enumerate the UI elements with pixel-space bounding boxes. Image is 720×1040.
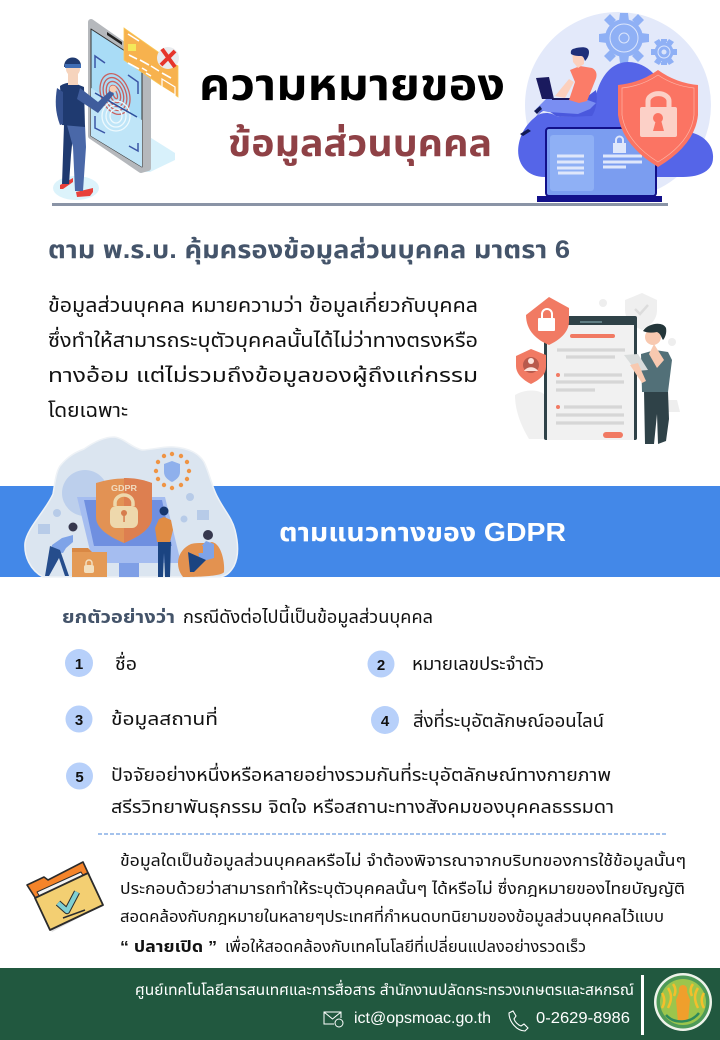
illustration: fingerprint phone <box>53 22 179 200</box>
footer organisation name: ศูนย์เทคโนโลยีสารสนเทศและการสื่อสาร สำนักงานปลัดกระทรวงเกษตรและสหกรณ์ <box>135 979 634 999</box>
footer <box>0 968 720 1040</box>
definition paragraph: ทางอ้อม แต่ไม่รวมถึงข้อมูลของผู้ถึงแก่กรรม <box>48 364 478 388</box>
item 5 <box>66 762 614 818</box>
icon: phone <box>509 1011 528 1031</box>
illustration: GDPR <box>25 437 238 577</box>
examples intro <box>62 604 433 629</box>
item 2 <box>368 650 544 678</box>
subtitle: ข้อมูลส่วนบุคคล <box>228 123 492 166</box>
banner heading: ตามแนวทางของ GDPR <box>279 517 566 547</box>
item 5: 5 <box>75 769 84 786</box>
item 1 <box>65 649 137 677</box>
item 3: ข้อมูลสถานที่ <box>111 706 218 731</box>
illustration: document and thinking man <box>515 293 680 444</box>
examples intro: ยกตัวอย่างว่า <box>62 607 175 627</box>
note paragraph: สอดคล้องกับกฎหมายในหลายๆประเทศที่กำหนดบทนิยามของข้อมูลส่วนบุคคลไว้แบบ <box>120 905 664 926</box>
divider <box>641 975 644 1035</box>
note paragraph: เพื่อให้สอดคล้องกับเทคโนโลยีที่เปลี่ยนแปลงอย่างรวดเร็ว <box>225 935 586 956</box>
item 4 <box>371 706 604 734</box>
note paragraph: “ ปลายเปิด ” <box>120 939 217 956</box>
note paragraph: ข้อมูลใดเป็นข้อมูลส่วนบุคคลหรือไม่ จำต้องพิจารณาจากบริบทของการใช้ข้อมูลนั้นๆ <box>120 850 686 870</box>
logo <box>654 973 712 1031</box>
definition paragraph: ข้อมูลส่วนบุคคล หมายความว่า ข้อมูลเกี่ยวกับบุคคล <box>48 291 478 318</box>
item 1: ชื่อ <box>115 651 137 674</box>
section heading: ตาม พ.ร.บ. คุ้มครองข้อมูลส่วนบุคคล มาตรา 6 <box>48 236 570 265</box>
illustration: GDPR: GDPR <box>111 484 137 493</box>
definition paragraph: โดยเฉพาะ <box>48 400 128 422</box>
definition paragraph: ซึ่งทำให้สามารถระบุตัวบุคคลนั้นได้ไม่ว่าทางตรงหรือ <box>48 326 478 352</box>
note paragraph: ประกอบด้วยว่าสามารถทำให้ระบุตัวบุคคลนั้นๆ ได้หรือไม่ ซึ่งกฎหมายของไทยบัญญัติ <box>120 877 685 898</box>
item 5: ปัจจัยอย่างหนึ่งหรือหลายอย่างรวมกันที่ระบุอัตลักษณ์ทางกายภาพ <box>111 762 611 786</box>
examples intro: กรณีดังต่อไปนี้เป็นข้อมูลส่วนบุคคล <box>183 604 433 629</box>
item 5: สรีรวิทยาพันธุกรรม จิตใจ หรือสถานะทางสังคมของบุคคลธรรมดา <box>111 797 614 818</box>
blue banner <box>0 486 720 577</box>
note paragraph <box>120 850 686 956</box>
illustration: cloud security <box>518 12 713 202</box>
email address: ict@opsmoac.go.th <box>354 1010 491 1027</box>
item 2: 2 <box>377 657 385 674</box>
item 4: 4 <box>381 713 390 730</box>
item 1: 1 <box>75 656 83 673</box>
title: ความหมายของ <box>199 61 505 110</box>
definition paragraph <box>48 291 478 422</box>
icon: folder with check <box>27 862 103 932</box>
item 3 <box>66 706 218 732</box>
phone number: 0-2629-8986 <box>536 1010 630 1027</box>
item 4: สิ่งที่ระบุอัตลักษณ์ออนไลน์ <box>413 708 604 732</box>
item 2: หมายเลขประจำตัว <box>412 654 544 674</box>
icon: email <box>324 1012 343 1027</box>
header rule <box>52 203 668 206</box>
item 3: 3 <box>75 712 83 729</box>
